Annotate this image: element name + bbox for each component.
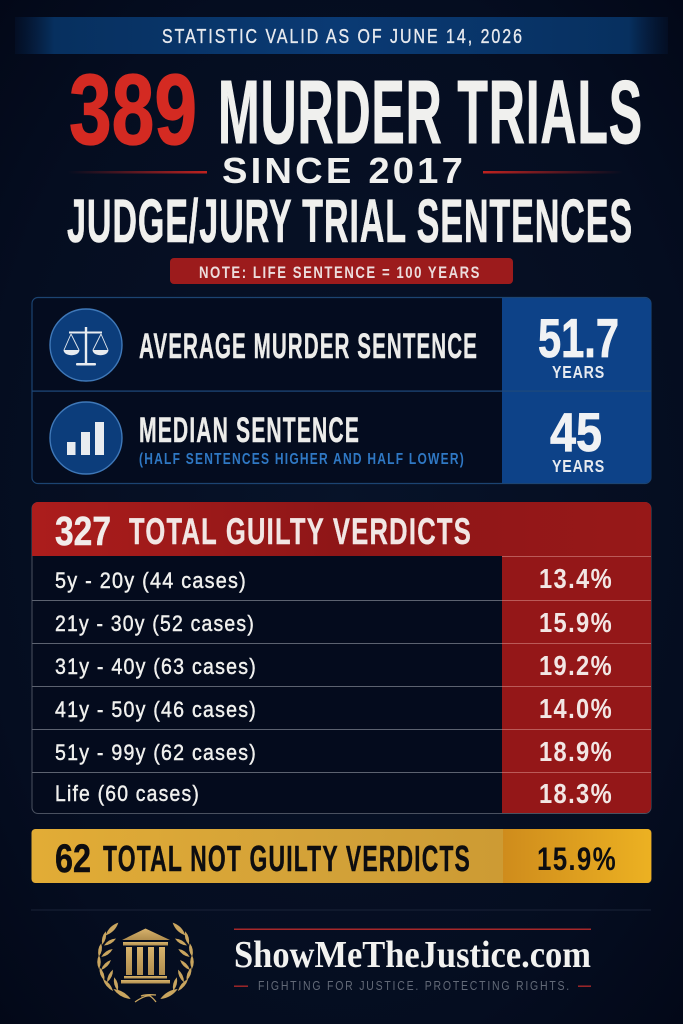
stat: 51.7 years: 51.7: [538, 307, 619, 369]
panel: not guilty verdicts: 15.9%: [537, 841, 617, 877]
note pill: NOTE: LIFE SENTENCE = 100 YEARS: [199, 263, 481, 282]
brand: ShowMeTheJustice.com: ShowMeTheJustice.com: [234, 934, 591, 976]
subtitle: since 2017: SINCE 2017: [222, 150, 466, 191]
row: 41y-50y: 14.0%: [539, 693, 613, 724]
row: 41y-50y: [55, 693, 613, 724]
icon: laurel wreath: [97, 921, 194, 1002]
row: 31y-40y: 19.2%: [539, 650, 613, 681]
stat: 45 years: YEARS: [552, 456, 605, 476]
panel: sentence stats: [32, 298, 651, 484]
panel: not guilty verdicts: TOTAL NOT GUILTY VERDICTS: [103, 838, 471, 879]
row: 21y-30y: [55, 607, 613, 638]
stat: 51.7 years: YEARS: [552, 362, 605, 382]
stat: 51.7 years: [538, 307, 619, 382]
row: 51y-99y: 51y - 99y (62 cases): [55, 740, 257, 765]
logo: courthouse and laurel wreath: [97, 921, 194, 1002]
row: 31y-40y: [55, 650, 613, 681]
top banner: [15, 17, 668, 54]
row: 5y-20y: 5y - 20y (44 cases): [55, 568, 247, 593]
row: 51y-99y: 18.9%: [539, 736, 613, 767]
table header: [32, 502, 651, 556]
icon: scales of justice: [50, 309, 122, 381]
brand: ShowMeTheJustice.com: [234, 928, 591, 993]
title number: 389: 389: [69, 54, 197, 166]
row: 21y-30y: 21y - 30y (52 cases): [55, 611, 255, 636]
panel: not guilty verdicts: 62: [55, 837, 91, 881]
row: 51y-99y: [55, 736, 613, 767]
row: 31y-40y: 31y - 40y (63 cases): [55, 654, 257, 679]
row: 5y-20y: [55, 563, 613, 594]
stat: 45 years: 45: [550, 401, 602, 463]
table header: TOTAL GUILTY VERDICTS: [129, 511, 472, 552]
panel: guilty verdicts table: [32, 502, 651, 814]
brand: ShowMeTheJustice.com: FIGHTING FOR JUSTICE. PROTECTING RIGHTS.: [258, 978, 571, 993]
row: life: [55, 778, 613, 809]
row: life: 18.3%: [539, 778, 613, 809]
row: 21y-30y: 15.9%: [539, 607, 613, 638]
heading: median sentence: MEDIAN SENTENCE: [139, 411, 360, 450]
note pill: [170, 258, 513, 284]
icon: courthouse: [121, 928, 170, 984]
row: 5y-20y: 13.4%: [539, 563, 613, 594]
icon: bar chart: [50, 402, 122, 474]
row: 41y-50y: 41y - 50y (46 cases): [55, 697, 257, 722]
top banner: STATISTIC VALID AS OF JUNE 14, 2026: [162, 26, 524, 48]
row: life: Life (60 cases): [55, 781, 200, 806]
table header: 327: [55, 508, 111, 554]
panel: not guilty verdicts: [32, 829, 652, 883]
title: [67, 54, 643, 255]
note: half sentences higher and half lower: (HALF SENTENCES HIGHER AND HALF LOWER): [139, 451, 465, 468]
